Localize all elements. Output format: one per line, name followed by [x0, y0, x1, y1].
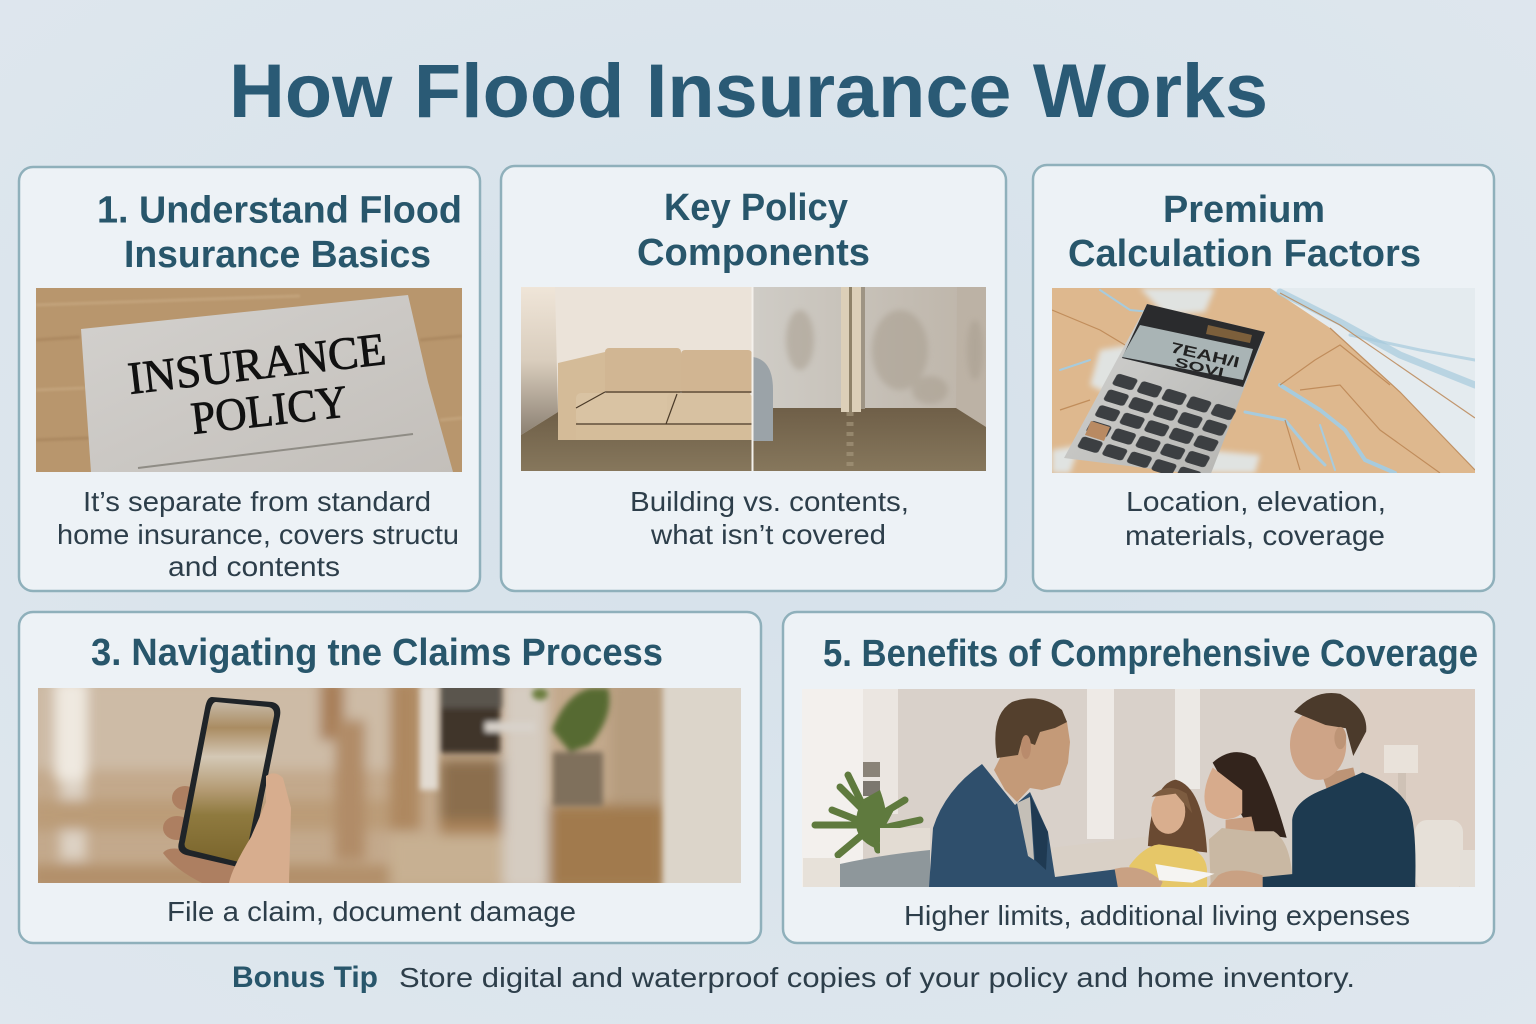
calculator: SOVI [1173, 354, 1225, 380]
panel: premium calculation factors [1033, 165, 1494, 591]
panel: key policy components [501, 166, 1006, 591]
heading: premium factors: Calculation Factors [1068, 233, 1421, 275]
heading: key policy components [637, 187, 870, 274]
panel: navigating the claims process [19, 612, 761, 943]
hand left [1114, 867, 1162, 887]
heading: benefits: 5. Benefits of Comprehensive Coverage [823, 633, 1478, 675]
panel: benefits of comprehensive coverage [783, 612, 1494, 943]
photo: insurance policy document: POLICY [188, 375, 350, 444]
caption: benefits: Higher limits, additional living expenses [904, 900, 1410, 931]
man right [1207, 693, 1415, 890]
bonus tip: Store digital and waterproof copies of your policy and home inventory. [399, 962, 1355, 993]
hand: rear fingers [163, 786, 240, 885]
panel: flood insurance basics [19, 167, 480, 591]
heading: claims process: 3. Navigating tne Claims Process [91, 632, 663, 674]
photo: furnished vs flooded room [521, 287, 986, 471]
calculator [1064, 304, 1265, 486]
heading: understand basics [97, 190, 462, 276]
girl [1129, 780, 1207, 888]
heading: premium factors: Premium [1163, 189, 1325, 231]
heading: understand basics: Insurance Basics [124, 234, 431, 276]
heading: key policy components: Components [637, 232, 870, 274]
photo: insurance policy document: INSURANCE [125, 323, 388, 404]
photo: family reviewing policy [802, 689, 1475, 890]
photo: phone documenting flooded room [30, 680, 748, 890]
caption: basics: home insurance, covers structu [57, 519, 459, 550]
heading: understand basics: 1. Understand Flood [97, 190, 462, 232]
sofa [558, 348, 752, 440]
caption: basics: It’s separate from standard [83, 486, 431, 517]
caption: components: what isn’t covered [650, 519, 886, 550]
caption: components [630, 486, 909, 550]
calculator: 7EAH/I [1169, 339, 1241, 372]
photo: calculator on flood map [1052, 288, 1475, 486]
man left [929, 698, 1130, 887]
paper [1155, 864, 1214, 883]
caption: premium factors: Location, elevation, [1126, 486, 1386, 517]
phone screen [185, 702, 274, 863]
title: How Flood Insurance Works [229, 49, 1268, 134]
caption: basics [57, 486, 459, 582]
caption: premium factors [1125, 486, 1386, 551]
heading: key policy components: Key Policy [664, 187, 848, 229]
heading: premium factors [1068, 189, 1421, 275]
sofa and cushions [803, 820, 1475, 890]
plant [815, 775, 920, 855]
caption: premium factors: materials, coverage [1125, 520, 1385, 551]
grey armrest [753, 357, 773, 441]
photo: insurance policy document [36, 288, 462, 472]
caption: basics: and contents [168, 551, 340, 582]
phone [178, 697, 280, 868]
bonus tip: Bonus Tip [232, 961, 378, 994]
caption: claims: File a claim, document damage [167, 896, 576, 927]
caption: components: Building vs. contents, [630, 486, 909, 517]
hand: front [229, 773, 291, 883]
curtain [841, 287, 865, 412]
woman [1204, 752, 1293, 888]
